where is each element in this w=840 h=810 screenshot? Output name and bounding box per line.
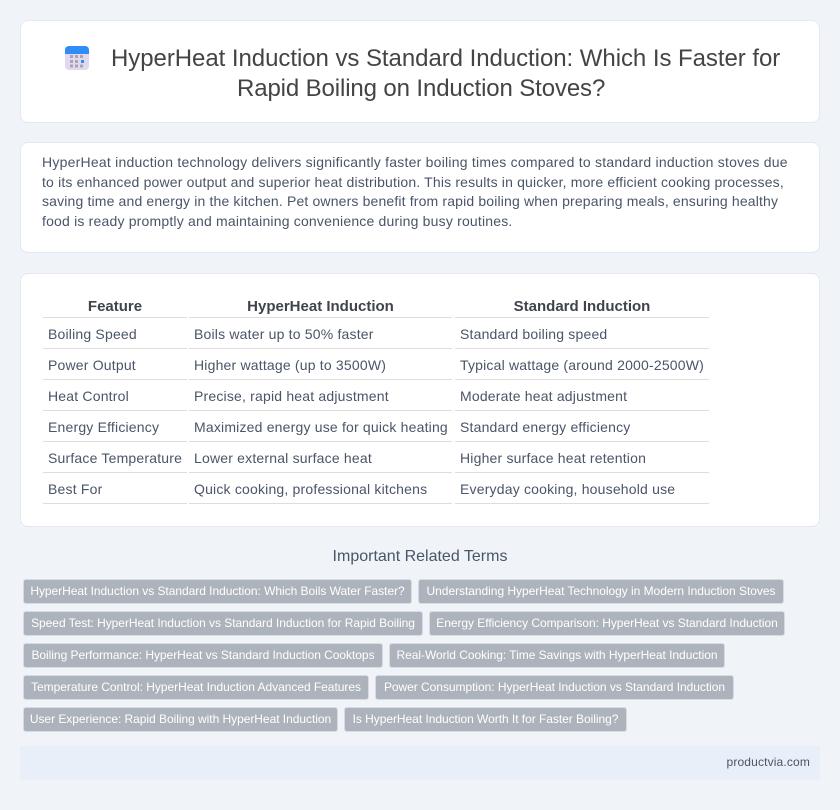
comparison table: Higher surface heat retention [460,450,646,466]
title: HyperHeat Induction vs Standard Induction: Which Is Faster for [111,45,780,72]
related term tags: Understanding HyperHeat Technology in Modern Induction Stoves [427,584,775,598]
comparison table: Moderate heat adjustment [460,388,627,404]
related term tags: Boiling Performance: HyperHeat vs Standard Induction Cooktops [31,648,375,662]
title panel [20,20,820,123]
related term tags: Real-World Cooking: Time Savings with HyperHeat Induction [396,648,717,662]
comparison table: Maximized energy use for quick heating [194,419,448,435]
intro text: to its enhanced power output and superior heat distribution. This results in quicker, more efficient cooking processes, [42,174,784,190]
comparison table [43,298,709,504]
comparison table: Lower external surface heat [194,450,372,466]
intro panel [20,142,820,253]
comparison table: Heat Control [48,388,129,404]
comparison table: Higher wattage (up to 3500W) [194,357,386,373]
related term tags: User Experience: Rapid Boiling with HyperHeat Induction [30,712,331,726]
intro text: food is ready promptly and maintaining convenience during busy routines. [42,213,513,229]
related term tags: Is HyperHeat Induction Worth It for Faster Boiling? [353,712,618,726]
comparison table: Everyday cooking, household use [460,481,675,497]
footer [20,746,820,780]
related term tags: Temperature Control: HyperHeat Induction Advanced Features [31,680,361,694]
comparison table: Standard boiling speed [460,326,607,342]
comparison table: Standard Induction [514,298,650,315]
related term tags [23,579,785,732]
title: Rapid Boiling on Induction Stoves? [237,75,605,102]
related term tags: Energy Efficiency Comparison: HyperHeat vs Standard Induction [436,616,778,630]
title [111,45,780,102]
comparison table: Energy Efficiency [48,419,159,435]
intro text: saving time and energy in the kitchen. Pet owners benefit from rapid boiling when preparing meals, ensuring healthy [42,193,778,209]
comparison table: Feature [88,298,142,315]
table panel [20,273,820,527]
related term tags: HyperHeat Induction vs Standard Induction: Which Boils Water Faster? [30,584,405,598]
related term tags: Power Consumption: HyperHeat Induction vs Standard Induction [384,680,725,694]
related terms heading: Important Related Terms [333,548,507,565]
comparison table: Typical wattage (around 2000-2500W) [460,357,704,373]
icon: calendar [65,46,89,70]
comparison table: Precise, rapid heat adjustment [194,388,389,404]
comparison table: Power Output [48,357,136,373]
comparison table: HyperHeat Induction [247,298,394,315]
comparison table: Boils water up to 50% faster [194,326,374,342]
comparison table: Standard energy efficiency [460,419,630,435]
intro text [42,154,788,229]
comparison table: Quick cooking, professional kitchens [194,481,427,497]
footer: productvia.com [727,755,810,769]
comparison table: Surface Temperature [48,450,182,466]
related term tags: Speed Test: HyperHeat Induction vs Standard Induction for Rapid Boiling [31,616,415,630]
comparison table: Best For [48,481,102,497]
comparison table: Boiling Speed [48,326,137,342]
intro text: HyperHeat induction technology delivers significantly faster boiling times compared to standard induction stoves due [42,154,788,170]
